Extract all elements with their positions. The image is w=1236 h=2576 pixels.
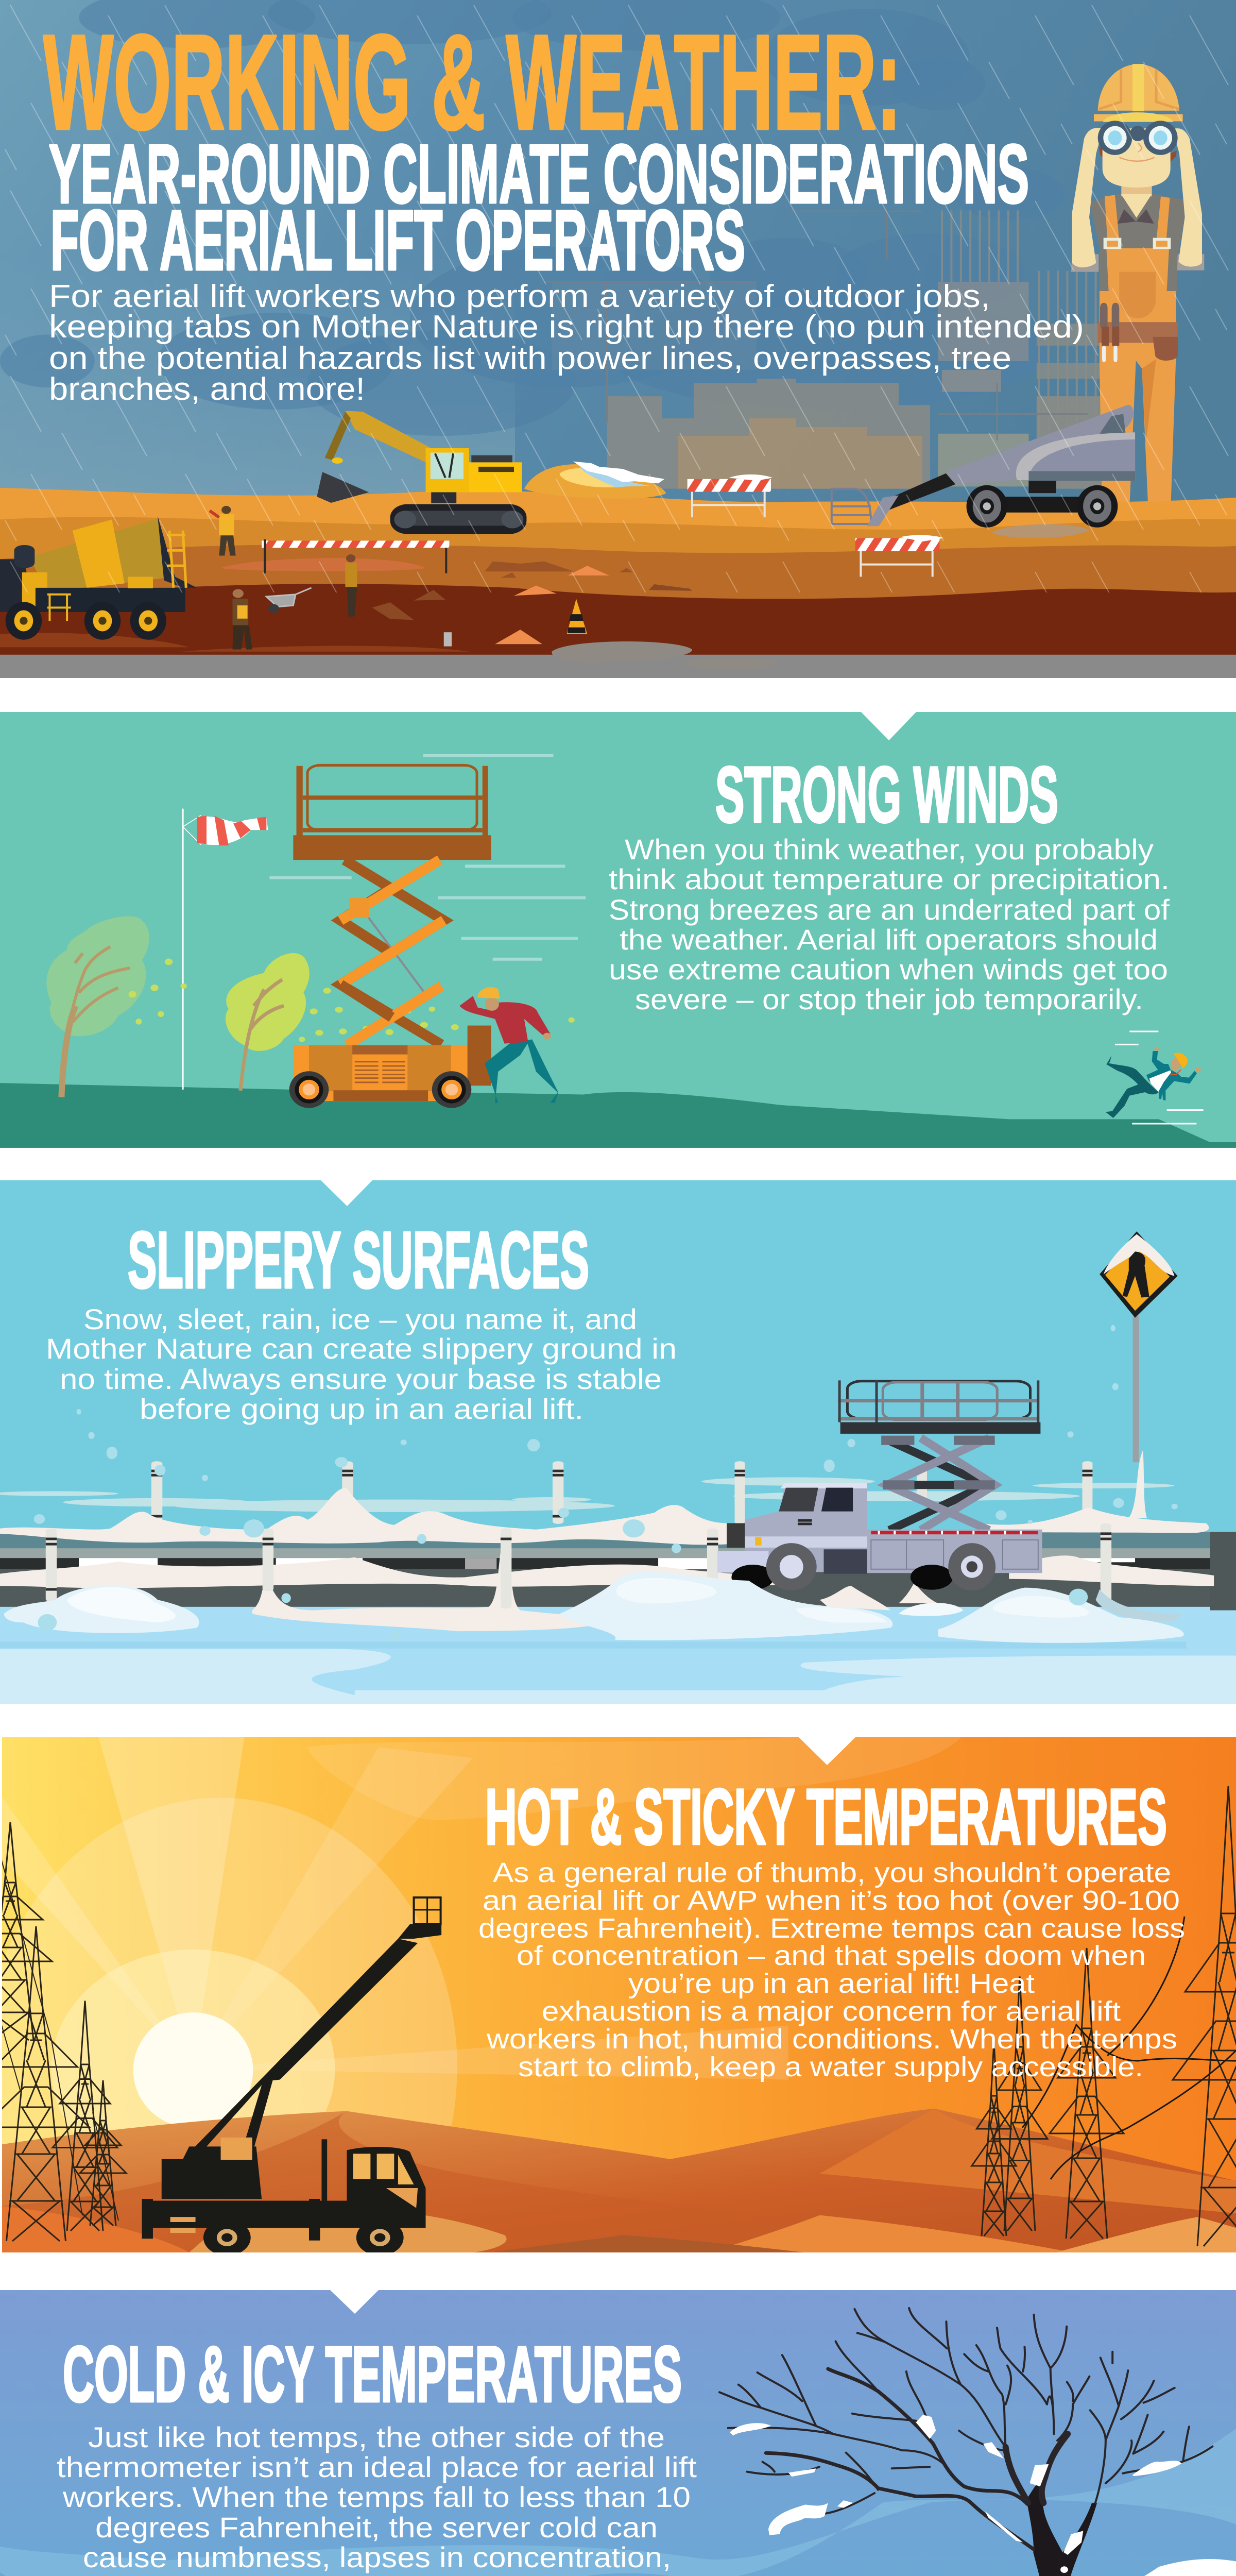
- body text: the weather. Aerial lift operators should: [620, 923, 1158, 956]
- snow near bottom: [252, 1537, 630, 1631]
- branches: [719, 2308, 1212, 2549]
- wind streaks: [269, 755, 586, 959]
- body text: When you think weather, you probably: [625, 833, 1154, 866]
- heading: SLIPPERY SURFACES: [128, 1215, 589, 1304]
- body text: Strong breezes are an underrated part of: [609, 893, 1170, 926]
- bare winter tree: [719, 2308, 1212, 2576]
- body text: degrees Fahrenheit, the server cold can: [95, 2511, 658, 2544]
- body text: workers in hot, humid conditions. When the temps: [486, 2024, 1177, 2055]
- city skyline: [544, 210, 1104, 489]
- snow hills back: [496, 2559, 1236, 2576]
- body text: workers. When the temps fall to less than 10: [62, 2481, 691, 2513]
- neck and collar: [1118, 184, 1154, 224]
- body text: [57, 2421, 697, 2576]
- panel background: [0, 712, 1236, 1148]
- notch: [321, 1180, 372, 1206]
- panel: hot and sticky temperatures: [0, 1737, 1236, 2336]
- intro text: [49, 279, 1084, 407]
- intro text: on the potential hazards list with power lines, overpasses, tree: [49, 341, 1011, 376]
- panel: cold and icy temperatures: [0, 2290, 1236, 2576]
- sunlight glow: [0, 1737, 788, 2336]
- windsock: [183, 809, 268, 1090]
- overalls: [1100, 248, 1176, 507]
- power pylons left: [0, 1822, 126, 2241]
- notch: [330, 2290, 379, 2314]
- sky background: [0, 0, 1236, 502]
- ice water: [0, 1607, 1236, 1704]
- barrier lower: [855, 535, 943, 577]
- notch: [799, 1737, 855, 1765]
- snow piles: [4, 1571, 1184, 1643]
- body text: Snow, sleet, rain, ice – you name it, and: [83, 1303, 637, 1335]
- pale sky swooshes: [0, 2429, 1236, 2576]
- giant worker with binoculars: [1071, 64, 1204, 507]
- body text: thermometer isn’t an ideal place for aerial lift: [57, 2451, 697, 2483]
- body text: cause numbness, lapses in concentration,: [83, 2541, 671, 2573]
- heat swirls: [307, 1737, 962, 1820]
- binoculars: [1098, 121, 1178, 155]
- ground layers: [0, 488, 1236, 681]
- notch: [861, 712, 916, 740]
- body text: As a general rule of thumb, you shouldn’t operate: [493, 1857, 1171, 1888]
- utility scissor truck: [717, 1380, 1042, 1590]
- body text: start to climb, keep a water supply accessible.: [518, 2052, 1143, 2082]
- helmet: [1094, 64, 1183, 122]
- trunk: [954, 2477, 1202, 2576]
- body text: [478, 1857, 1185, 2082]
- falling worker: [1106, 1031, 1204, 1124]
- front posts: [46, 1523, 1111, 1608]
- body text: of concentration – and that spells doom when: [517, 1940, 1146, 1971]
- lift arms: [881, 1438, 995, 1530]
- sun: [133, 2012, 253, 2128]
- back posts: [151, 1461, 1092, 1524]
- intro text: keeping tabs on Mother Nature is right up there (no pun intended): [49, 309, 1084, 345]
- panel: header: [0, 0, 1236, 681]
- snow on branches: [730, 2415, 1181, 2576]
- panel background: [0, 1180, 1236, 1704]
- scissor arms: [340, 860, 444, 1045]
- raised arms: [1072, 128, 1103, 267]
- blowing leaves: [128, 958, 575, 1042]
- tree right: [226, 953, 310, 1091]
- silhouette crane truck: [142, 1897, 441, 2256]
- cab: [717, 1483, 867, 1574]
- sleeves: [1071, 254, 1204, 272]
- ground: [0, 1083, 1236, 1148]
- face: [1103, 128, 1171, 188]
- bridge wall and road: [0, 1532, 1236, 1611]
- worker bracing against wind: [459, 987, 558, 1103]
- basket: [838, 1380, 1039, 1422]
- excavator: [317, 411, 526, 534]
- workers: [210, 506, 357, 650]
- barrier top: [688, 474, 772, 517]
- body text: an aerial lift or AWP when it’s too hot (over 90-100: [483, 1885, 1180, 1916]
- body text: you’re up in an aerial lift! Heat: [628, 1968, 1035, 1999]
- panel background: [0, 2290, 1236, 2576]
- illustration: rocks and cone: [372, 562, 692, 647]
- tool belt: [1098, 303, 1178, 362]
- wheels: [731, 1543, 995, 1590]
- body text: [609, 833, 1170, 1015]
- body text: use extreme caution when winds get too: [609, 953, 1168, 986]
- storm clouds: [0, 0, 552, 436]
- body text: severe – or stop their job temporarily.: [635, 983, 1143, 1015]
- road: [0, 655, 1236, 681]
- lift base: [289, 1026, 491, 1108]
- background drifting snow: [0, 1477, 1175, 1512]
- desert dunes: [0, 2109, 1236, 2252]
- intro text: For aerial lift workers who perform a variety of outdoor jobs,: [49, 279, 990, 314]
- falling snowflakes: [34, 1325, 1178, 1641]
- mound with snow: [524, 462, 666, 499]
- body text: think about temperature or precipitation.: [609, 863, 1170, 895]
- power pylons right: [972, 1786, 1236, 2246]
- cement mixer truck: [0, 516, 197, 640]
- rain: [0, 0, 1236, 592]
- body text: Mother Nature can create slippery ground in: [46, 1332, 677, 1365]
- scissor lift: [289, 765, 491, 1108]
- panel background: [2, 1737, 1236, 2252]
- panel: slippery surfaces: [0, 1180, 1236, 1704]
- platform: [293, 765, 491, 860]
- snow on wall: [0, 1488, 729, 1545]
- icon: pedestrian warning sign: [1100, 1231, 1178, 1462]
- shirt: [1089, 194, 1185, 293]
- boom lift: [832, 405, 1135, 528]
- body text: [46, 1303, 677, 1425]
- body text: before going up in an aerial lift.: [140, 1393, 583, 1425]
- tree left: [46, 917, 149, 1097]
- hair: [1098, 146, 1177, 162]
- body text: Just like hot temps, the other side of the: [88, 2421, 665, 2453]
- snow on road: [0, 1555, 1214, 1588]
- panel: strong winds: [0, 712, 1236, 1148]
- body text: no time. Always ensure your base is stable: [60, 1363, 662, 1395]
- barrier long: [262, 539, 449, 573]
- body text: degrees Fahrenheit). Extreme temps can cause loss: [478, 1913, 1185, 1944]
- body text: exhaustion is a major concern for aerial lift: [542, 1996, 1121, 2027]
- truck bed: [867, 1530, 1042, 1573]
- heading: COLD & ICY TEMPERATURES: [63, 2330, 682, 2418]
- intro text: branches, and more!: [49, 371, 365, 407]
